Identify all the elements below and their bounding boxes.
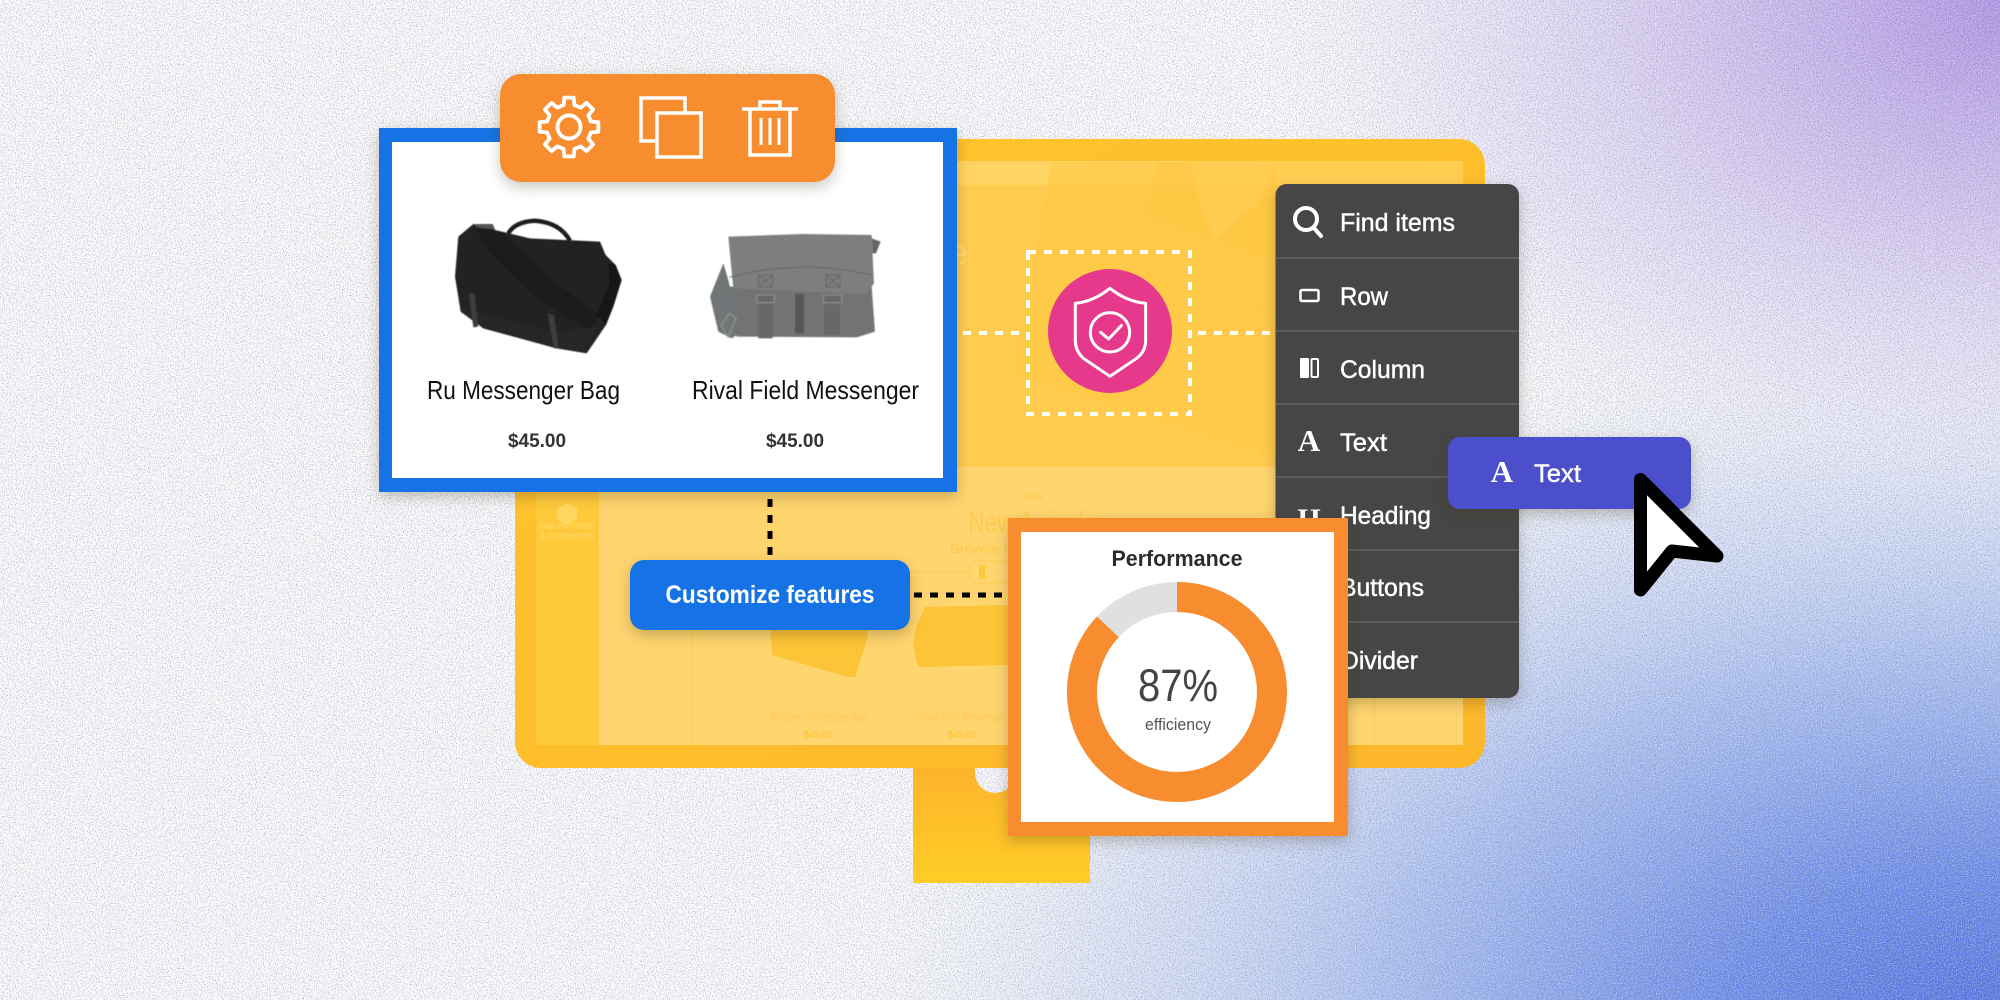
- faded hero outline: [940, 215, 992, 400]
- nav band: [536, 161, 1463, 185]
- card interior: [392, 142, 943, 478]
- right content rule: [1374, 690, 1375, 745]
- panel interior: [1021, 532, 1334, 822]
- performance heading: Performance: [1112, 546, 1242, 571]
- faded price two: $45.00: [948, 729, 976, 741]
- monitor stand: [913, 768, 1090, 883]
- faded subheading: Browse these: [950, 541, 1040, 556]
- dragged text chip: [1448, 437, 1691, 509]
- black dashed connectors: [770, 499, 1006, 595]
- faded hero text: e: [948, 232, 968, 273]
- label: column: Column: [1340, 356, 1425, 384]
- button: customize features: Customize features: [666, 581, 874, 609]
- monitor body: [515, 139, 1485, 768]
- icon: text: A: [1298, 423, 1321, 458]
- hero area: [536, 161, 1463, 467]
- icon: column: [1300, 358, 1318, 378]
- donut caption: efficiency: [1145, 715, 1211, 734]
- label: row: Row: [1340, 283, 1389, 311]
- monitor: [515, 139, 1485, 883]
- faded caption one: Wayfarer Messenger Bag: [770, 709, 867, 724]
- product name two: Rival Field Messenger: [692, 375, 919, 405]
- chip icon: A: [1491, 454, 1514, 489]
- donut chart: [1082, 597, 1272, 787]
- content row rule: [692, 571, 972, 572]
- product image: gray bag: [710, 234, 881, 338]
- icon: row: [1300, 290, 1318, 301]
- pink security badge: [1048, 269, 1172, 393]
- icon: shield with check: [1075, 288, 1146, 376]
- faded price one: $45.00: [804, 729, 832, 741]
- product image: black bag: [455, 221, 622, 353]
- faded hero bag: [1013, 161, 1463, 460]
- product name one: Ru Messenger Bag: [427, 375, 620, 405]
- panel: performance: [1008, 518, 1348, 836]
- menu dividers: [1276, 257, 1519, 623]
- icon: search: [1295, 208, 1321, 236]
- toolbar: [500, 74, 835, 182]
- faded product control: [970, 561, 1020, 583]
- white dashed connectors: [963, 252, 1272, 414]
- button: customize features: [630, 560, 910, 630]
- sidebar icon: [557, 503, 577, 525]
- label: divider: Divider: [1341, 647, 1418, 675]
- label: find items: Find items: [1340, 209, 1455, 237]
- content section: [599, 467, 1463, 745]
- icon: duplicate: [641, 98, 701, 157]
- faded heading: New Arrivals: [968, 507, 1095, 539]
- cursor arrow: [1640, 480, 1717, 590]
- label: heading: Heading: [1340, 502, 1431, 530]
- sidebar label line two: & EXTENSIONS: [540, 531, 594, 541]
- sidebar: [536, 467, 599, 745]
- label: buttons: Buttons: [1340, 574, 1424, 602]
- donut value: 87%: [1138, 660, 1218, 711]
- panel: product card: [379, 128, 957, 492]
- label: text: Text: [1340, 429, 1387, 457]
- product price two: $45.00: [766, 431, 824, 452]
- product price one: $45.00: [508, 431, 566, 452]
- icon: heading: H: [1297, 503, 1321, 536]
- panel: element menu: [1276, 184, 1519, 698]
- faded bag two: [913, 605, 1008, 667]
- faded bag one: [770, 620, 868, 677]
- icon: trash: [742, 102, 798, 155]
- faded row label: Row: [1023, 492, 1044, 503]
- monitor screen: [536, 161, 1463, 745]
- faded caption two: Rival Field Messenger: [919, 709, 1005, 724]
- icon: gear: [540, 98, 598, 156]
- sidebar label: FIND PARTNERS: [539, 521, 595, 531]
- content divider: [692, 571, 693, 745]
- chip label: Text: [1534, 460, 1581, 488]
